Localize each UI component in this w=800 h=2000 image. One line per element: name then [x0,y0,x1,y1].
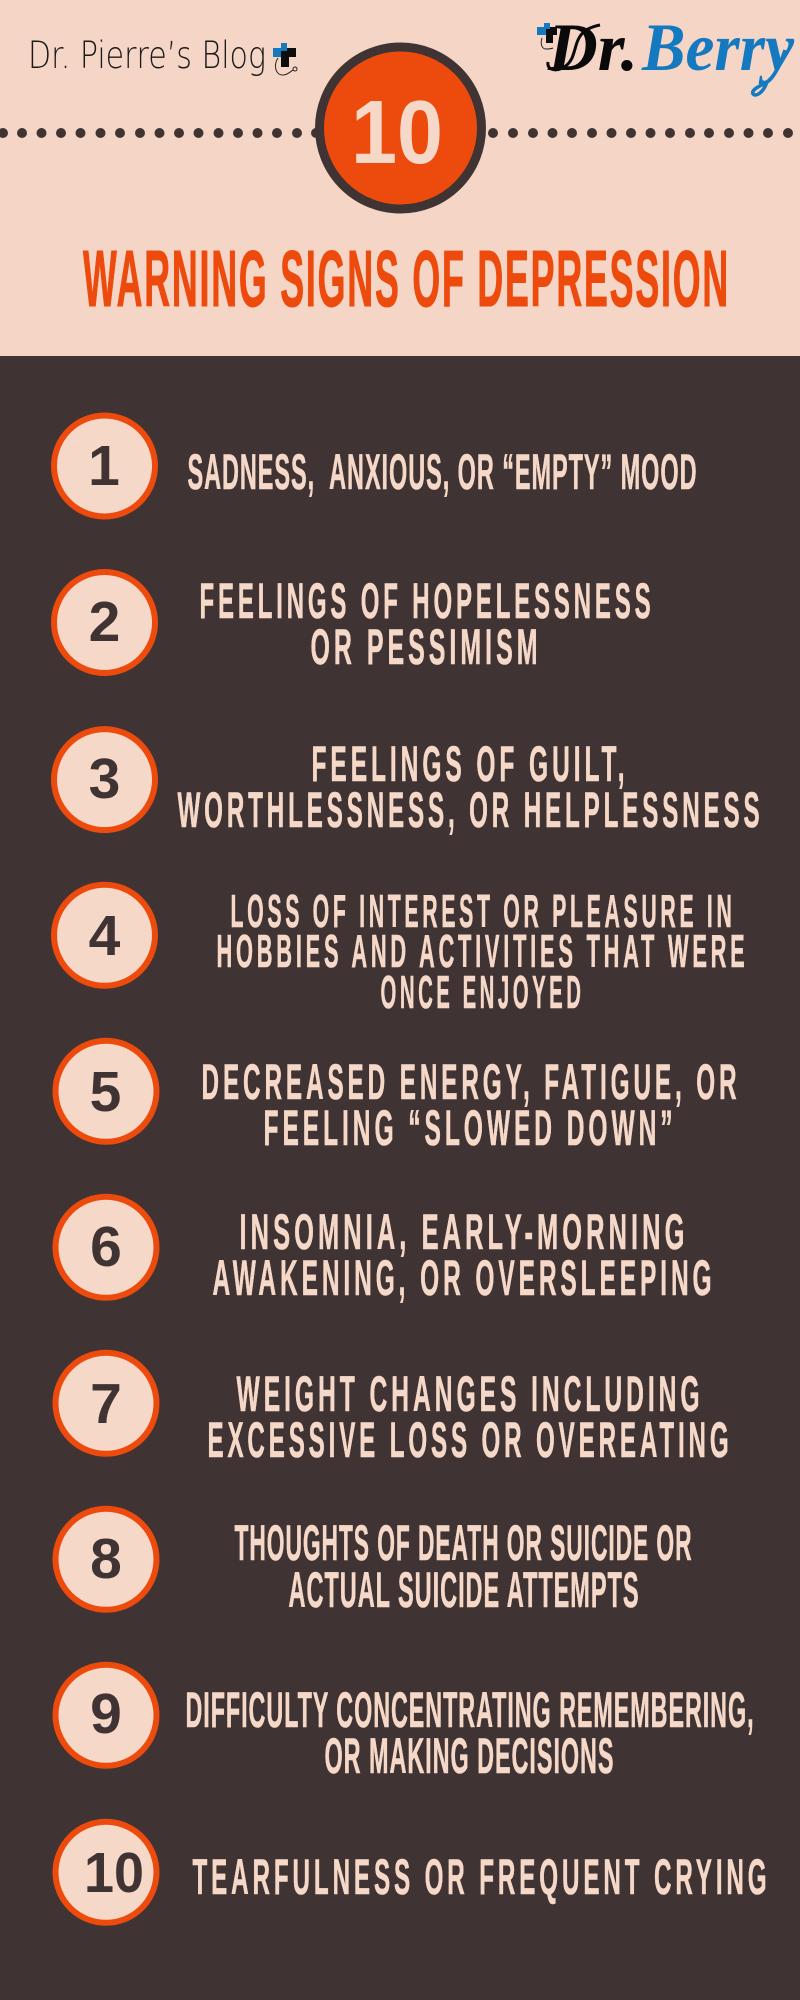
item 6 [56,1197,716,1306]
badge 2: 2 [89,590,120,654]
icon: medical cross with stethoscope [273,43,297,75]
badge 2 [54,572,155,673]
item 4 [54,885,748,1018]
badge 4: 4 [89,904,121,968]
item 7 [56,1353,732,1468]
text 2 [200,573,654,675]
badge 9 [56,1665,156,1766]
badge 7: 7 [90,1372,122,1436]
logo: Dr. Berry: Berry [641,9,795,85]
logo: Dr. Pierre's Blog: Dr. Pierre’s Blog [28,34,266,77]
logo: Dr. Berry: Dr. [547,9,638,85]
badge 6: 6 [90,1215,122,1279]
badge 4 [54,885,155,986]
badge 9: 9 [90,1682,122,1746]
text 5 [202,1054,740,1156]
dotted line [0,128,793,138]
badge 8 [56,1509,156,1610]
badge: 10: 10 [351,83,443,183]
badge 3: 3 [89,747,120,811]
text 9 [186,1682,754,1784]
badge 8: 8 [90,1527,122,1591]
badge 6 [56,1197,156,1298]
text 2: OR PESSIMISM [310,619,542,675]
logo: Dr. Berry [537,9,795,95]
text 4 [216,885,748,1018]
badge 10: 10 [84,1841,144,1905]
badge 5: 5 [90,1060,121,1124]
item 9 [56,1665,754,1784]
item 10 [56,1822,770,1923]
icon: medical cross with stethoscope [537,23,557,49]
item 1 [54,416,698,516]
badge 10 [56,1822,156,1923]
text 8 [234,1515,692,1618]
item 5 [56,1041,740,1156]
item 8 [56,1509,692,1618]
text 7 [208,1366,732,1468]
badge 3 [54,729,155,830]
text 6 [212,1204,716,1306]
badge 1: 1 [88,434,120,498]
text 3 [178,736,764,838]
item 3 [54,729,764,838]
badge 1 [54,416,155,516]
badge 5 [56,1041,156,1142]
badge: 10 [320,47,482,209]
panel: header [0,0,800,356]
badge 7 [56,1353,156,1454]
item 2 [54,572,654,675]
